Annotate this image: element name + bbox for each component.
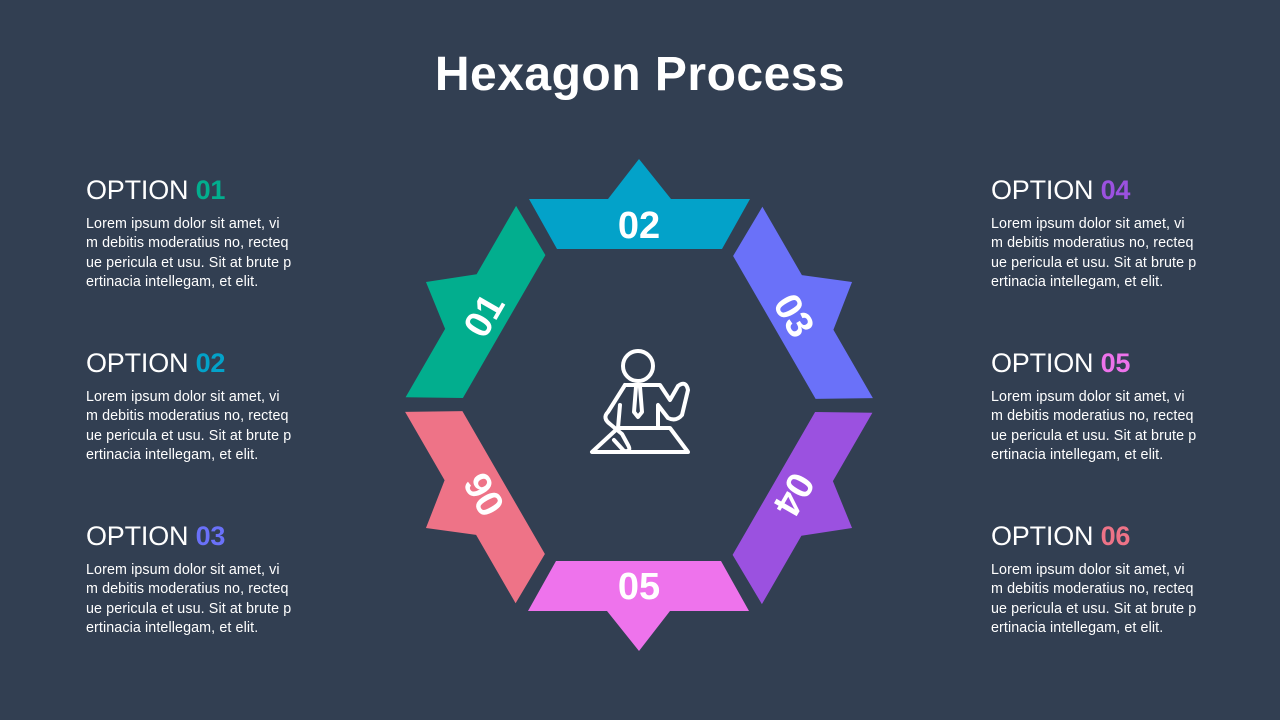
segment 02 xyxy=(529,159,750,249)
option 06: Lorem ipsum dolor sit amet, vi xyxy=(991,562,1185,578)
segment 03 xyxy=(719,187,908,423)
segment 03: 03 xyxy=(764,287,822,345)
option 05: ue pericula et usu. Sit at brute p xyxy=(991,428,1196,444)
option 01: m debitis moderatius no, recteq xyxy=(86,235,289,251)
option 04: OPTION 04 xyxy=(991,175,1130,205)
title: Hexagon Process xyxy=(435,48,845,101)
option 06: ue pericula et usu. Sit at brute p xyxy=(991,601,1196,617)
option 02: OPTION 02 xyxy=(86,348,225,378)
option 06 xyxy=(991,521,1196,636)
segment 01: 01 xyxy=(456,287,514,345)
segment 05: 05 xyxy=(618,566,660,608)
option 03 xyxy=(86,521,291,636)
option 06: m debitis moderatius no, recteq xyxy=(991,581,1194,597)
option 05 xyxy=(991,348,1196,463)
option 01 xyxy=(86,175,291,290)
option 02 xyxy=(86,348,291,463)
option 02: ertinacia intellegam, et elit. xyxy=(86,447,258,463)
option 03: ue pericula et usu. Sit at brute p xyxy=(86,601,291,617)
option 05: Lorem ipsum dolor sit amet, vi xyxy=(991,389,1185,405)
option 01: Lorem ipsum dolor sit amet, vi xyxy=(86,216,280,232)
option 01: ertinacia intellegam, et elit. xyxy=(86,274,258,290)
option 03: Lorem ipsum dolor sit amet, vi xyxy=(86,562,280,578)
segment 06 xyxy=(370,387,559,623)
option 02: ue pericula et usu. Sit at brute p xyxy=(86,428,291,444)
option 02: m debitis moderatius no, recteq xyxy=(86,408,289,424)
option 05: OPTION 05 xyxy=(991,348,1130,378)
segment 04: 04 xyxy=(764,465,822,523)
option 02: Lorem ipsum dolor sit amet, vi xyxy=(86,389,280,405)
option 05: ertinacia intellegam, et elit. xyxy=(991,447,1163,463)
icon: businessman at desk xyxy=(592,351,688,452)
option 01: ue pericula et usu. Sit at brute p xyxy=(86,255,291,271)
option 01: OPTION 01 xyxy=(86,175,225,205)
option 03: OPTION 03 xyxy=(86,521,225,551)
option 03: m debitis moderatius no, recteq xyxy=(86,581,289,597)
segment 04 xyxy=(719,388,907,624)
segment 01 xyxy=(371,186,559,422)
option 04 xyxy=(991,175,1196,290)
option 04: ertinacia intellegam, et elit. xyxy=(991,274,1163,290)
option 03: ertinacia intellegam, et elit. xyxy=(86,620,258,636)
option 05: m debitis moderatius no, recteq xyxy=(991,408,1194,424)
option 04: m debitis moderatius no, recteq xyxy=(991,235,1194,251)
option 04: Lorem ipsum dolor sit amet, vi xyxy=(991,216,1185,232)
option 04: ue pericula et usu. Sit at brute p xyxy=(991,255,1196,271)
segment 05 xyxy=(528,561,749,651)
segment 06: 06 xyxy=(456,465,514,523)
option 06: OPTION 06 xyxy=(991,521,1130,551)
segment 02: 02 xyxy=(618,205,660,247)
option 06: ertinacia intellegam, et elit. xyxy=(991,620,1163,636)
